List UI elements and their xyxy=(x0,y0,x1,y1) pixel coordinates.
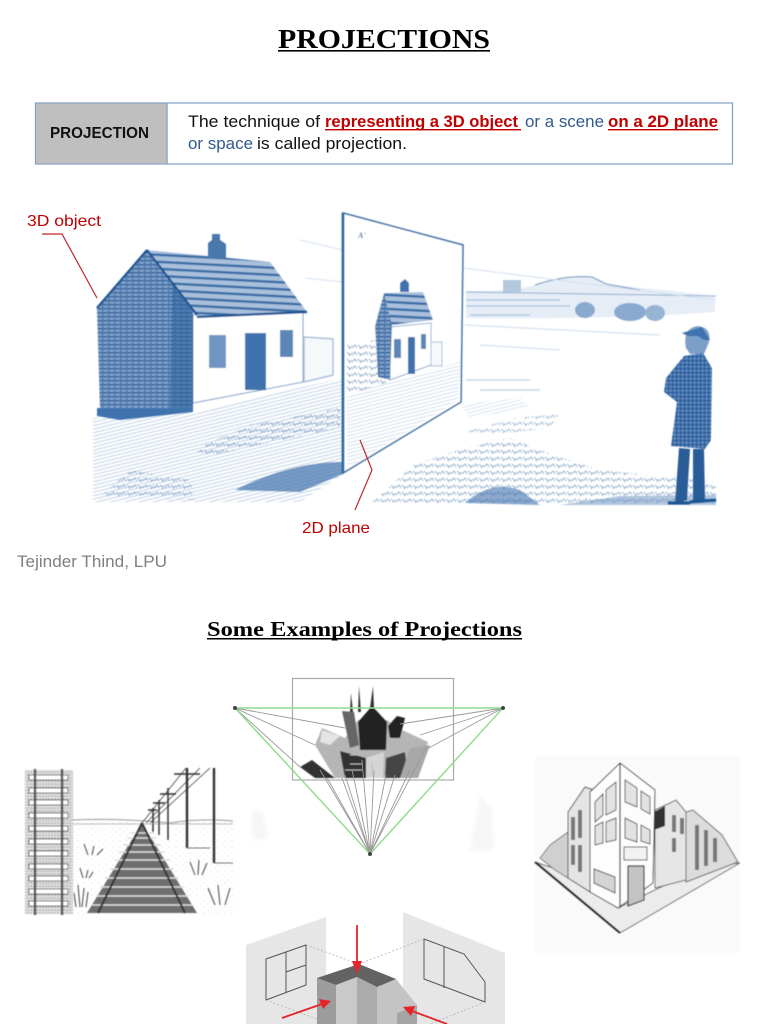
street ground xyxy=(535,862,740,933)
definition text: The technique of xyxy=(188,112,320,131)
picture plane: A' xyxy=(357,231,366,240)
city buildings xyxy=(300,686,430,778)
label: 3D object: 3D object xyxy=(27,213,102,230)
side buildings right xyxy=(654,800,738,888)
vanishing points xyxy=(233,706,505,856)
definition panel xyxy=(36,103,732,164)
city frame xyxy=(292,678,454,780)
observer xyxy=(664,326,716,504)
definition text: representing a 3D object xyxy=(325,112,518,131)
definition label xyxy=(36,103,168,164)
definition text: or a scene xyxy=(525,112,604,131)
definition text xyxy=(188,112,718,153)
corner building xyxy=(590,763,655,908)
vanishing lines green xyxy=(235,708,503,854)
faint smudges xyxy=(252,795,494,852)
3D solid xyxy=(317,964,417,1024)
picture plane xyxy=(343,213,463,473)
construction lines xyxy=(235,708,503,854)
label: 2D plane xyxy=(302,440,372,537)
projection dashed guides xyxy=(266,939,485,1024)
example: orthographic projection planes xyxy=(246,912,505,1024)
railway track in perspective xyxy=(92,823,192,913)
railway ground xyxy=(73,819,233,915)
definition text: is called projection. xyxy=(257,134,407,153)
illustration: house, picture plane and observer xyxy=(93,213,716,505)
label: 3D object xyxy=(27,213,102,298)
title: PROJECTIONS xyxy=(278,24,490,54)
example: one-point perspective railway xyxy=(25,768,233,915)
street background xyxy=(535,756,740,953)
foreground ground xyxy=(93,378,716,505)
plane reflected house xyxy=(375,279,442,380)
example: three-point perspective city xyxy=(233,678,505,856)
grass tufts xyxy=(74,844,230,907)
projection arrows xyxy=(282,925,447,1024)
railway plan view xyxy=(25,769,73,915)
house xyxy=(97,234,333,420)
definition text: on a 2D plane xyxy=(608,112,718,131)
telegraph poles xyxy=(142,768,233,863)
definition text: or space xyxy=(188,134,253,153)
definition label: PROJECTION xyxy=(50,125,149,142)
right projection plane xyxy=(403,912,505,1024)
label: 2D plane: 2D plane xyxy=(302,520,370,537)
side buildings left xyxy=(540,787,594,892)
left projection plane xyxy=(246,917,326,1024)
background landscape xyxy=(300,240,716,390)
author credit: Tejinder Thind, LPU xyxy=(17,552,167,571)
example: two-point perspective street xyxy=(535,756,740,953)
examples heading: Some Examples of Projections xyxy=(207,617,522,641)
